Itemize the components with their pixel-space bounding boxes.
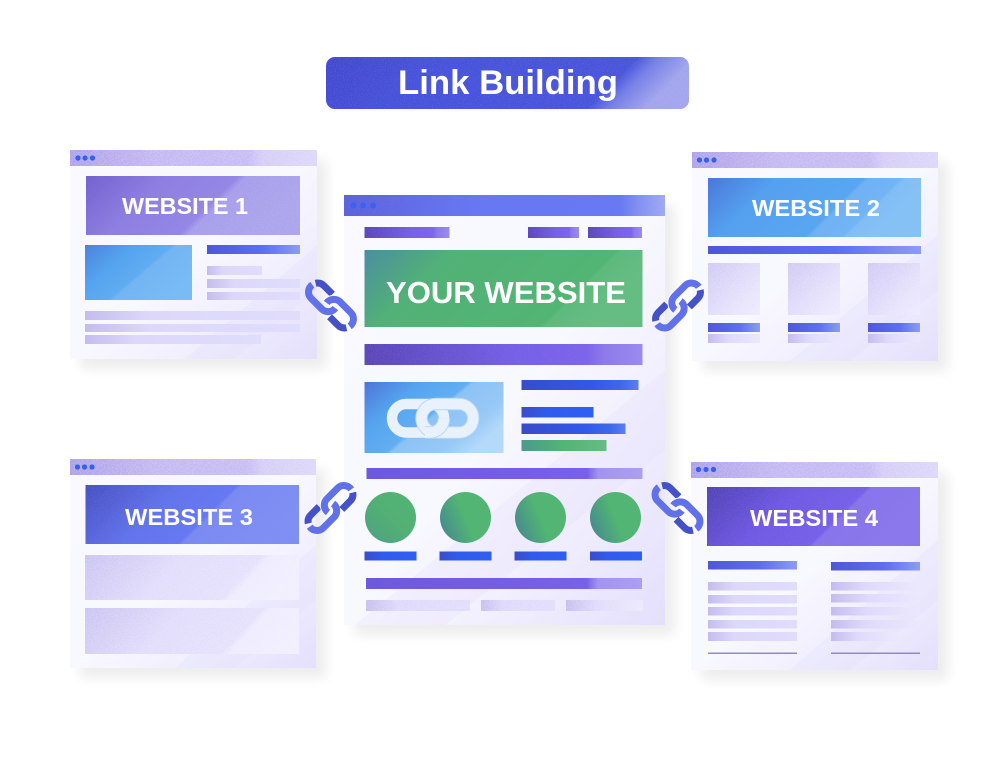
left text column bbox=[708, 561, 797, 654]
browser bar bbox=[344, 195, 665, 216]
title pill bbox=[326, 57, 689, 109]
text lines bbox=[85, 245, 300, 344]
icon: chain website 1 bbox=[305, 279, 357, 332]
panel: your website bbox=[344, 195, 675, 635]
banner bbox=[86, 176, 300, 235]
image with link icon bbox=[364, 382, 504, 453]
image block bbox=[85, 245, 192, 300]
nav items bbox=[364, 227, 642, 238]
icon: chain website 3 bbox=[304, 482, 357, 534]
content blocks bbox=[85, 555, 299, 654]
section bar bbox=[364, 344, 642, 365]
panel: website 2 bbox=[692, 152, 948, 371]
banner bbox=[86, 485, 299, 544]
banner: WEBSITE 4 bbox=[750, 505, 878, 531]
green circles and labels bbox=[364, 492, 642, 560]
panel: website 4 bbox=[691, 462, 948, 680]
banner bbox=[707, 487, 920, 546]
banner: WEBSITE 2 bbox=[752, 195, 880, 221]
main banner: YOUR WEBSITE bbox=[386, 275, 626, 310]
icon: chain website 4 bbox=[651, 482, 704, 534]
browser bar bbox=[70, 150, 317, 166]
section bar bbox=[366, 578, 642, 589]
section bar bbox=[366, 468, 642, 479]
icon: chain link bbox=[392, 404, 473, 433]
browser bar bbox=[691, 462, 938, 478]
right text column bbox=[831, 562, 920, 654]
footer items bbox=[366, 600, 643, 611]
browser bar bbox=[70, 459, 316, 475]
browser bar bbox=[692, 152, 938, 168]
text lines bbox=[522, 380, 638, 451]
banner bbox=[708, 178, 921, 237]
banner: WEBSITE 1 bbox=[122, 193, 248, 219]
title pill: Link Building bbox=[398, 64, 618, 102]
three product cards bbox=[708, 263, 920, 343]
heading bar bbox=[708, 246, 921, 254]
panel: website 1 bbox=[70, 150, 327, 369]
icon: chain website 2 bbox=[652, 279, 704, 332]
panel: website 3 bbox=[70, 459, 326, 678]
banner: WEBSITE 3 bbox=[125, 504, 253, 530]
main banner bbox=[364, 250, 642, 327]
